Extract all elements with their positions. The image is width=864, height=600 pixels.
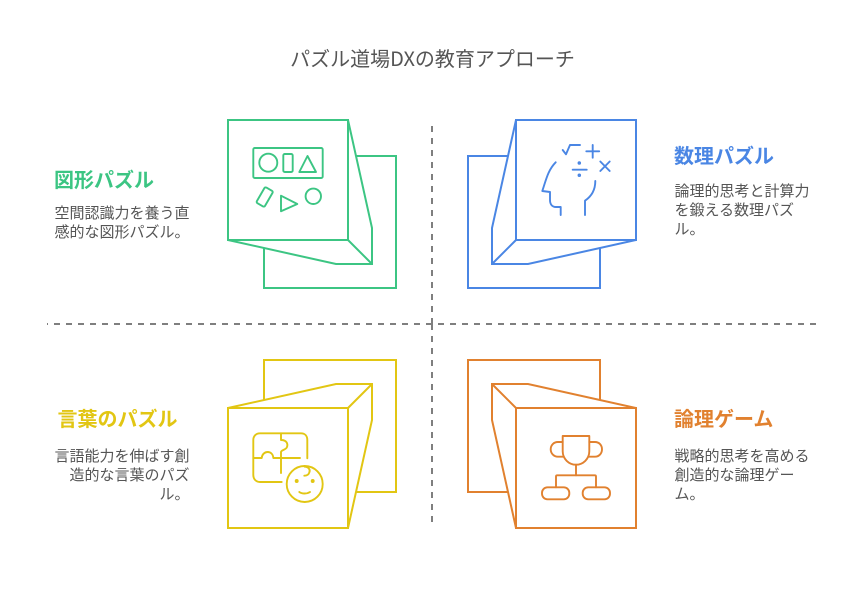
text: logic game description: ム。 bbox=[674, 483, 705, 504]
heading: math puzzle: 数理パズル bbox=[674, 140, 774, 169]
text: math puzzle description: を鍛える数理パズ bbox=[674, 199, 794, 220]
panel: logic game bbox=[468, 360, 810, 528]
cube: blue folded square bbox=[468, 120, 636, 288]
heading: word puzzle: 言葉のパズル bbox=[58, 403, 178, 432]
panel: math puzzle bbox=[468, 120, 810, 288]
text: shape puzzle description: 感的な図形パズル。 bbox=[54, 221, 190, 242]
text: word puzzle description: 造的な言葉のパズ bbox=[69, 464, 190, 485]
panel: word puzzle bbox=[54, 360, 396, 528]
heading: logic game: 論理ゲーム bbox=[674, 403, 773, 432]
text: word puzzle description: 言語能力を伸ばす創 bbox=[54, 445, 190, 466]
title: パズル道場DXの教育アプローチ bbox=[290, 43, 575, 72]
text: math puzzle description: ル。 bbox=[674, 218, 705, 239]
cube: yellow folded square bbox=[228, 360, 396, 528]
cube: green folded square bbox=[228, 120, 396, 288]
text: word puzzle description: ル。 bbox=[159, 483, 190, 504]
text: math puzzle description bbox=[674, 180, 810, 239]
text: shape puzzle description: 空間認識力を養う直 bbox=[54, 202, 190, 223]
text: shape puzzle description bbox=[54, 202, 190, 242]
text: logic game description: 戦略的思考を高める bbox=[674, 445, 810, 466]
text: math puzzle description: 論理的思考と計算力 bbox=[674, 180, 810, 201]
text: logic game description bbox=[674, 445, 810, 504]
text: word puzzle description bbox=[54, 445, 190, 504]
panel: shape puzzle bbox=[54, 120, 396, 288]
text: logic game description: 創造的な論理ゲー bbox=[674, 464, 795, 485]
dividers bbox=[47, 126, 816, 522]
heading: shape puzzle: 図形パズル bbox=[54, 164, 154, 193]
icon: puzzle and baby face bbox=[253, 433, 323, 502]
icon: trophy and flowchart bbox=[542, 436, 610, 499]
icon: geometric shapes bbox=[253, 148, 323, 211]
icon: head with math symbols bbox=[542, 145, 610, 215]
cube: orange folded square bbox=[468, 360, 636, 528]
